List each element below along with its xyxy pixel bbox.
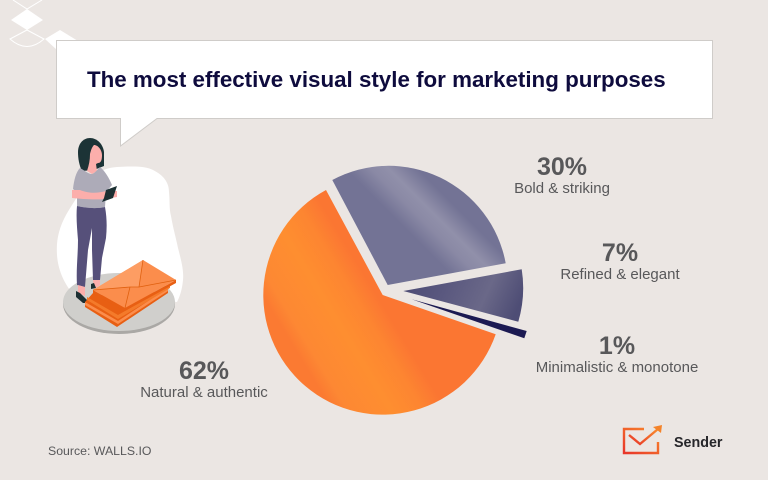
- slice: natural & authentic 62%: [263, 190, 496, 415]
- hair: [78, 138, 104, 171]
- face and neck: [87, 145, 102, 174]
- label: 1% minimalistic and monotone: 1%: [599, 332, 635, 360]
- white blob: [57, 166, 183, 302]
- platform: [63, 273, 175, 334]
- feet: [78, 285, 85, 296]
- shirt: [73, 167, 112, 208]
- title: The most effective visual style for marketing purposes: [87, 67, 666, 92]
- source: Source: WALLS.IO: [48, 444, 151, 458]
- slice: minimalistic & monotone 1%: [412, 299, 527, 338]
- label: 30% bold and striking: 30%: [537, 153, 587, 181]
- label: 62% natural and authentic: [140, 357, 268, 401]
- label: 30% bold and striking: [514, 153, 610, 197]
- decorative diamonds: [10, 0, 78, 50]
- logo icon: sender envelope: [624, 425, 662, 453]
- label: 1% minimalistic and monotone: Minimalistic & monotone: [536, 359, 698, 376]
- label: 62% natural and authentic: 62%: [179, 357, 229, 385]
- label: 30% bold and striking: Bold & striking: [514, 180, 610, 197]
- phone: [102, 186, 117, 202]
- label: 62% natural and authentic: Natural & authentic: [140, 384, 268, 401]
- pie chart: [263, 166, 527, 415]
- pants: [77, 206, 107, 287]
- logo wordmark: Sender: [674, 435, 722, 451]
- label: 7% refined and elegant: [560, 239, 680, 283]
- envelope stack: [85, 260, 176, 327]
- label: 7% refined and elegant: 7%: [602, 239, 638, 267]
- illustration: woman with envelopes: [57, 138, 183, 334]
- speech bubble: [56, 40, 712, 146]
- label: 7% refined and elegant: Refined & elegant: [560, 266, 680, 283]
- slice: refined & elegant 7%: [403, 269, 523, 322]
- arm: [72, 190, 117, 199]
- woman: [72, 138, 117, 303]
- slice: bold & striking 30%: [332, 166, 506, 285]
- label: 1% minimalistic and monotone: [536, 332, 698, 376]
